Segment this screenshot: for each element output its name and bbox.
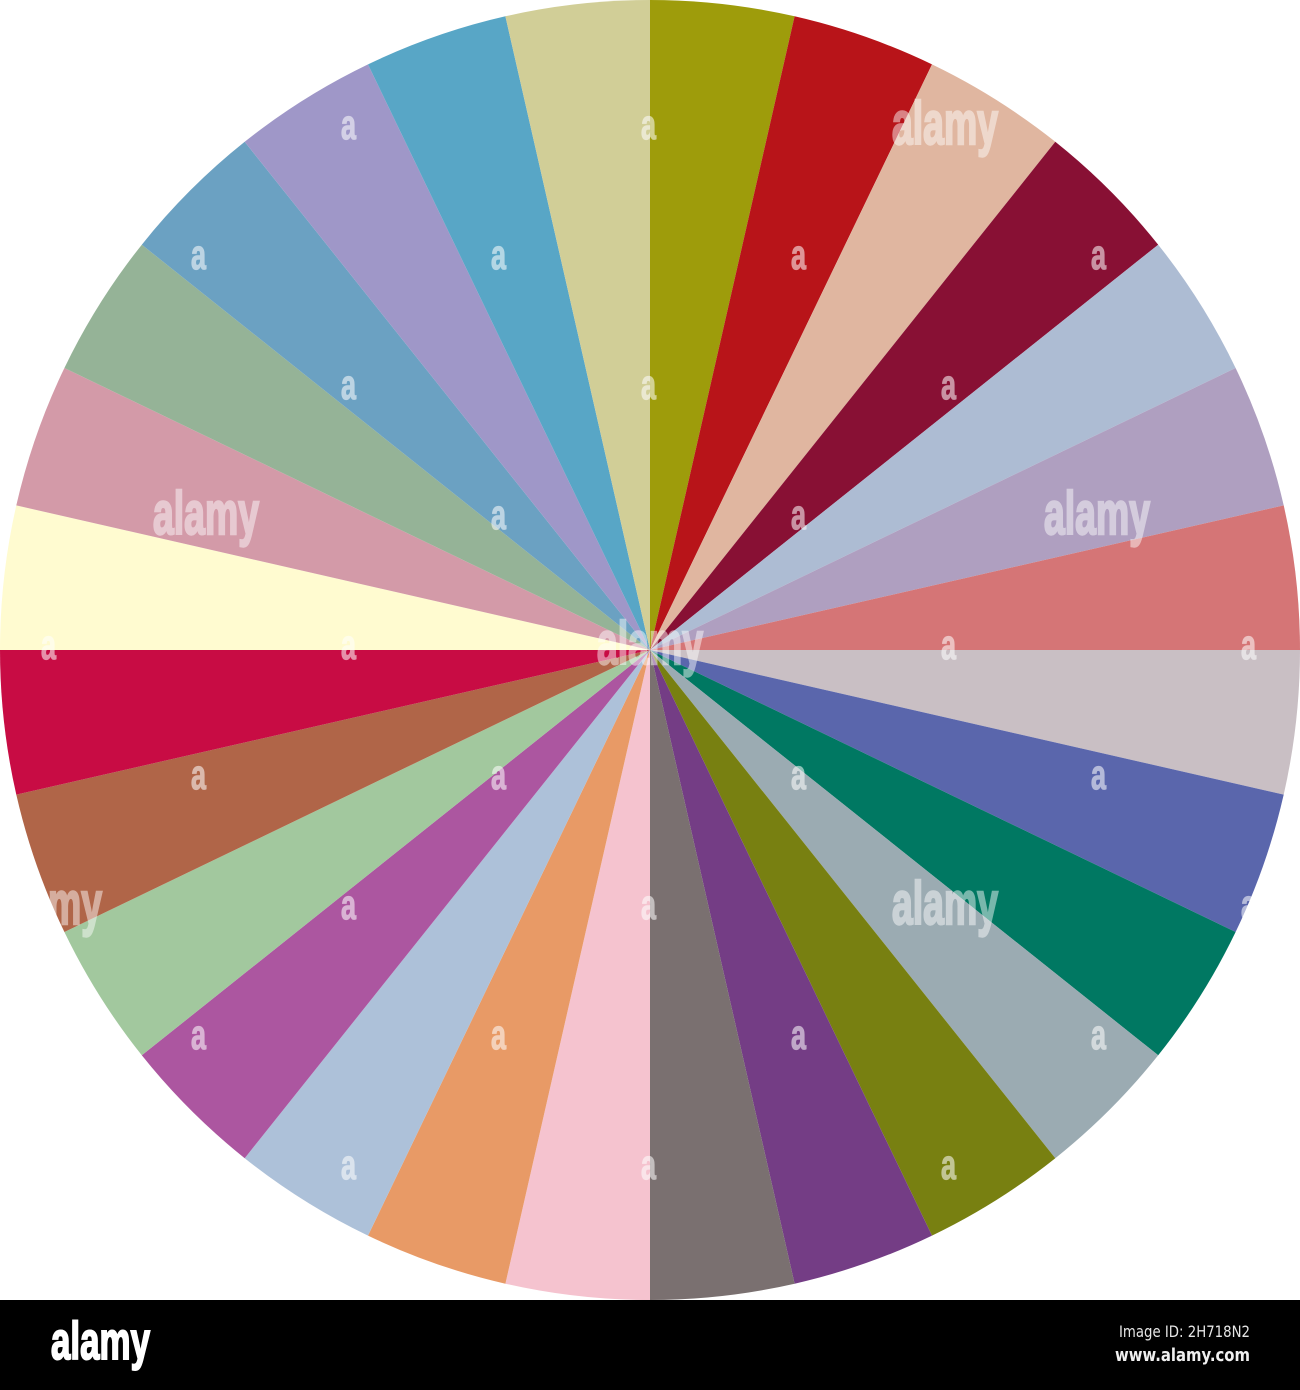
slice 15: pink — [505, 650, 650, 1300]
slice 16: orange — [368, 650, 650, 1284]
slice 18: magenta — [142, 650, 650, 1158]
large repeated alamy watermarks: alamy — [892, 870, 998, 937]
small repeated watermark letters: a — [1091, 231, 1106, 278]
small repeated watermark letters: a — [641, 1141, 656, 1188]
small repeated watermark letters: a — [191, 1011, 206, 1058]
small repeated watermark letters: a — [1241, 881, 1256, 928]
small repeated watermark letters: a — [491, 751, 506, 798]
small repeated watermark letters: a — [791, 491, 806, 538]
slice 19: light green — [64, 650, 650, 1055]
small repeated watermark letters: a — [1091, 1011, 1106, 1058]
slice 23: dusty pink — [16, 368, 650, 650]
small repeated watermark letters: a — [41, 621, 56, 668]
slice 28: khaki — [505, 0, 650, 650]
slice 8: grey pink — [650, 650, 1300, 795]
small repeated watermark letters: a — [341, 101, 356, 148]
slice 10: teal — [650, 650, 1236, 1055]
small repeated watermark letters: a — [341, 881, 356, 928]
small repeated watermark letters: a — [191, 231, 206, 278]
large repeated alamy watermarks: alamy — [597, 610, 703, 677]
large repeated alamy watermarks: alamy — [1044, 480, 1150, 547]
slice 24: sage — [64, 245, 650, 650]
slice 22: pale yellow — [0, 505, 650, 650]
small repeated watermark letters: a — [941, 1141, 956, 1188]
slice 13: purple — [650, 650, 932, 1284]
small repeated watermark letters: a — [791, 231, 806, 278]
slice 12: olive green — [650, 650, 1055, 1236]
footer logo: alamy — [51, 1312, 150, 1371]
large repeated alamy watermarks — [0, 90, 1150, 937]
slice 9: indigo blue — [650, 650, 1284, 932]
small repeated watermark letters: a — [1091, 751, 1106, 798]
small repeated watermark letters: a — [641, 101, 656, 148]
slice 4: maroon — [650, 142, 1158, 650]
small repeated watermark letters: a — [491, 231, 506, 278]
slice 11: blue grey — [650, 650, 1158, 1158]
small repeated watermark letters: a — [491, 491, 506, 538]
slice 3: peach — [650, 64, 1055, 650]
small repeated watermark letters: a — [641, 361, 656, 408]
small repeated watermark letters: a — [791, 751, 806, 798]
slice 21: crimson — [0, 650, 650, 795]
slice 6: mauve — [650, 368, 1284, 650]
small repeated watermark letters: a — [191, 751, 206, 798]
slice 20: brown — [16, 650, 650, 932]
slice 7: salmon — [650, 505, 1300, 650]
slice 25: steel blue — [142, 142, 650, 650]
slice 1: olive — [650, 0, 795, 650]
large repeated alamy watermarks: alamy — [0, 870, 102, 937]
website url: www.alamy.com — [1115, 1345, 1250, 1366]
slice 17: pale blue — [245, 650, 650, 1236]
slice 5: light blue — [650, 245, 1236, 650]
small repeated watermark letters: a — [941, 361, 956, 408]
slice 26: lavender — [245, 64, 650, 650]
large repeated alamy watermarks: alamy — [153, 480, 259, 547]
small repeated watermark letters: a — [341, 1141, 356, 1188]
small repeated watermark letters: a — [341, 361, 356, 408]
small repeated watermark letters: a — [491, 1011, 506, 1058]
footer bar — [0, 1300, 1300, 1390]
small repeated watermark letters: a — [341, 621, 356, 668]
small repeated watermark letters: a — [791, 1011, 806, 1058]
image id: Image ID: 2H718N2 — [1119, 1322, 1250, 1341]
small repeated watermark letters: a — [941, 621, 956, 668]
small repeated watermark letters — [41, 101, 1256, 1188]
small repeated watermark letters: a — [1241, 621, 1256, 668]
slice 2: red — [650, 16, 932, 650]
slice 27: sky blue — [368, 16, 650, 650]
large repeated alamy watermarks: alamy — [892, 90, 998, 157]
small repeated watermark letters: a — [641, 881, 656, 928]
slice 14: warm grey — [650, 650, 795, 1300]
